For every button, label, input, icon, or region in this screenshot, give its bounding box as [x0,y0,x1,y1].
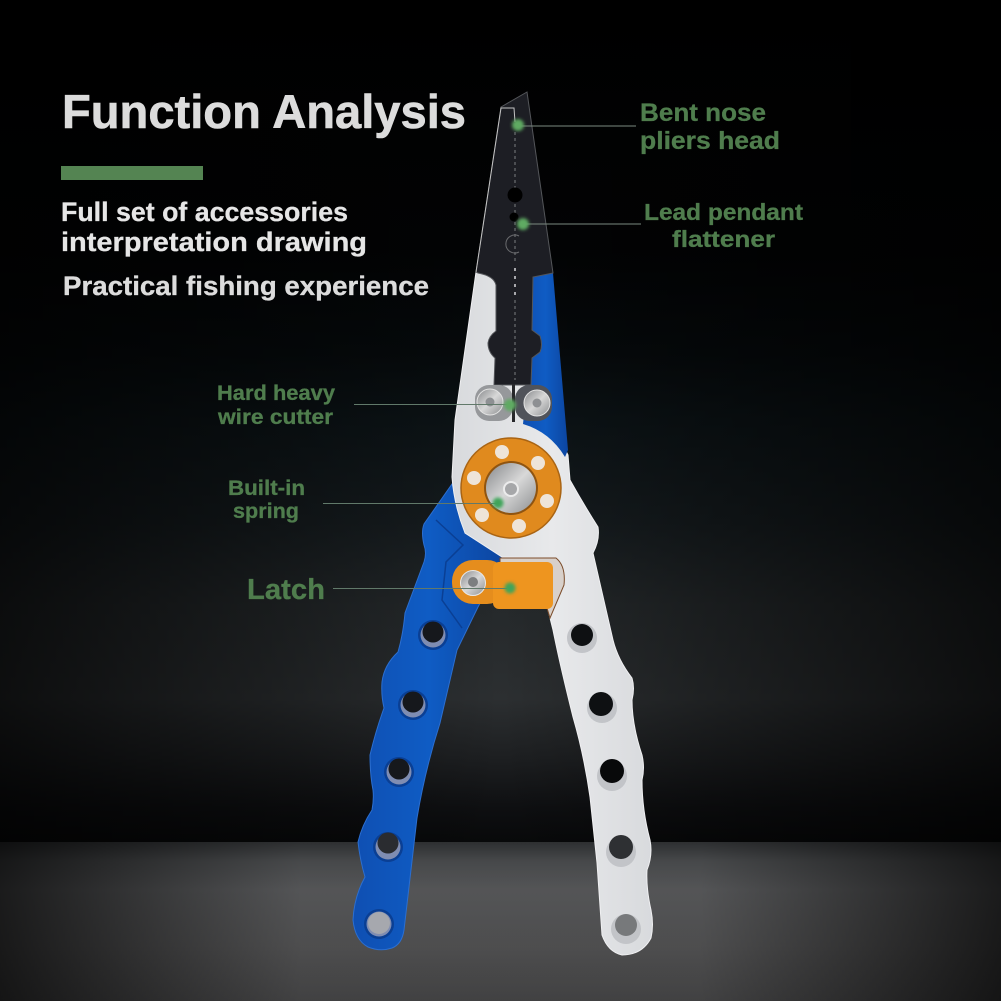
callout: hard heavy wire cutter [217,382,516,429]
blue left handle [353,484,505,950]
orange pivot disc [461,438,561,538]
callout: lead pendant flattener [517,199,803,252]
blue upper jaw [523,273,568,457]
pliers illustration [353,92,652,955]
right handle finger holes [567,623,641,944]
subtitle text block [61,197,429,301]
callout: bent nose pliers head: pliers head [640,127,780,155]
textured floor [0,842,1001,1001]
callout: bent nose pliers head [512,99,780,155]
callout: built-in spring [228,477,504,523]
callout: built-in spring: spring [233,500,299,523]
callout: lead pendant flattener: Lead pendant [644,199,803,225]
callout: latch: Latch [247,574,325,606]
callout: bent nose pliers head: Bent nose [640,99,766,127]
orange latch [452,558,564,618]
title: Function Analysis [62,85,466,138]
subtitle text block: Practical fishing experience [63,271,429,301]
black bent nose head [476,92,553,385]
callout: latch [247,574,516,606]
subtitle text block: interpretation drawing [61,227,367,257]
silver right arm and handle [452,272,652,955]
subtitle text block: Full set of accessories [61,197,348,227]
callout: hard heavy wire cutter: Hard heavy [217,382,335,405]
callout: hard heavy wire cutter: wire cutter [217,406,333,429]
green accent bar [61,166,203,180]
left handle finger holes [364,620,448,939]
callout: lead pendant flattener: flattener [672,226,775,252]
callout: built-in spring: Built-in [228,477,305,500]
wire cutter plate with screws [475,384,552,422]
